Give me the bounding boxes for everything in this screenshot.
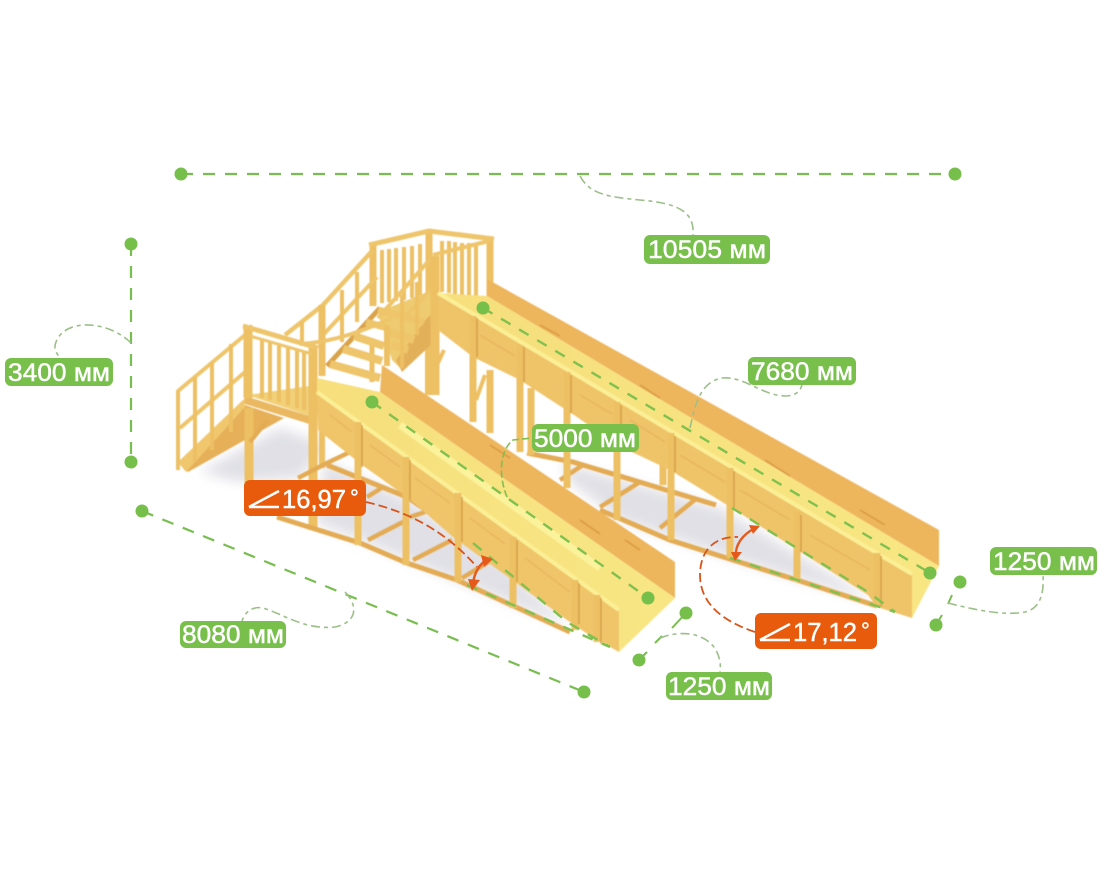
stair flight and steps (327, 290, 434, 382)
structure: slide with stairs (178, 231, 939, 652)
deck (317, 378, 675, 652)
posts (358, 422, 597, 642)
dimension: left slide width (632, 606, 720, 672)
lower stair (178, 335, 284, 472)
label: 5000 мм: 5000 мм (534, 425, 636, 453)
label: angle 16,97: 16,97 (282, 484, 346, 514)
posts (473, 316, 877, 607)
deck (438, 293, 939, 618)
label: 3400 мм: 3400 мм (8, 359, 110, 387)
dimension: right slide width (930, 575, 1043, 632)
near wall grain (330, 415, 570, 592)
angle callout arrows right (700, 525, 760, 632)
label: angle 17,12 (755, 613, 877, 649)
label: 1250 мм right: 1250 мм (993, 548, 1095, 576)
far wall (380, 365, 675, 598)
lower landing with railing (243, 325, 322, 530)
far wall grain (490, 445, 640, 550)
far wall (487, 279, 939, 566)
wall light edge (438, 293, 912, 574)
label: angle 17,12: ° (861, 618, 870, 643)
upper platform railing (369, 231, 494, 306)
label: 10505 мм: 10505 мм (648, 236, 766, 264)
left slide (317, 365, 675, 652)
floor shadows (200, 428, 880, 628)
label: angle 17,12: 17,12 (793, 617, 857, 647)
near wall grain (480, 335, 870, 570)
near wall (317, 392, 619, 652)
ramp underside dashes (467, 508, 895, 647)
upper stair railing (285, 240, 493, 395)
label: angle 16,97 (244, 480, 366, 516)
angle callout arrows left (366, 502, 493, 591)
dimension: height (55, 238, 138, 468)
label: angle 16,97: ° (350, 485, 359, 510)
dimension: long slide (476, 302, 936, 580)
label: 7680 мм: 7680 мм (751, 358, 853, 386)
label: 1250 мм bottom: 1250 мм (668, 673, 770, 701)
dimension: overall width (136, 504, 590, 698)
label: 8080 мм: 8080 мм (182, 621, 284, 649)
deck highlight (400, 425, 600, 568)
right slide (438, 279, 939, 618)
near wall (438, 293, 912, 618)
left slide ground frame (277, 452, 570, 632)
wall light edge (317, 392, 619, 610)
far wall grain (540, 325, 885, 525)
right slide ground frame (490, 360, 877, 606)
dimension: overall length (174, 168, 962, 235)
dimension: short slide (366, 396, 654, 604)
stair back legs (428, 330, 485, 400)
